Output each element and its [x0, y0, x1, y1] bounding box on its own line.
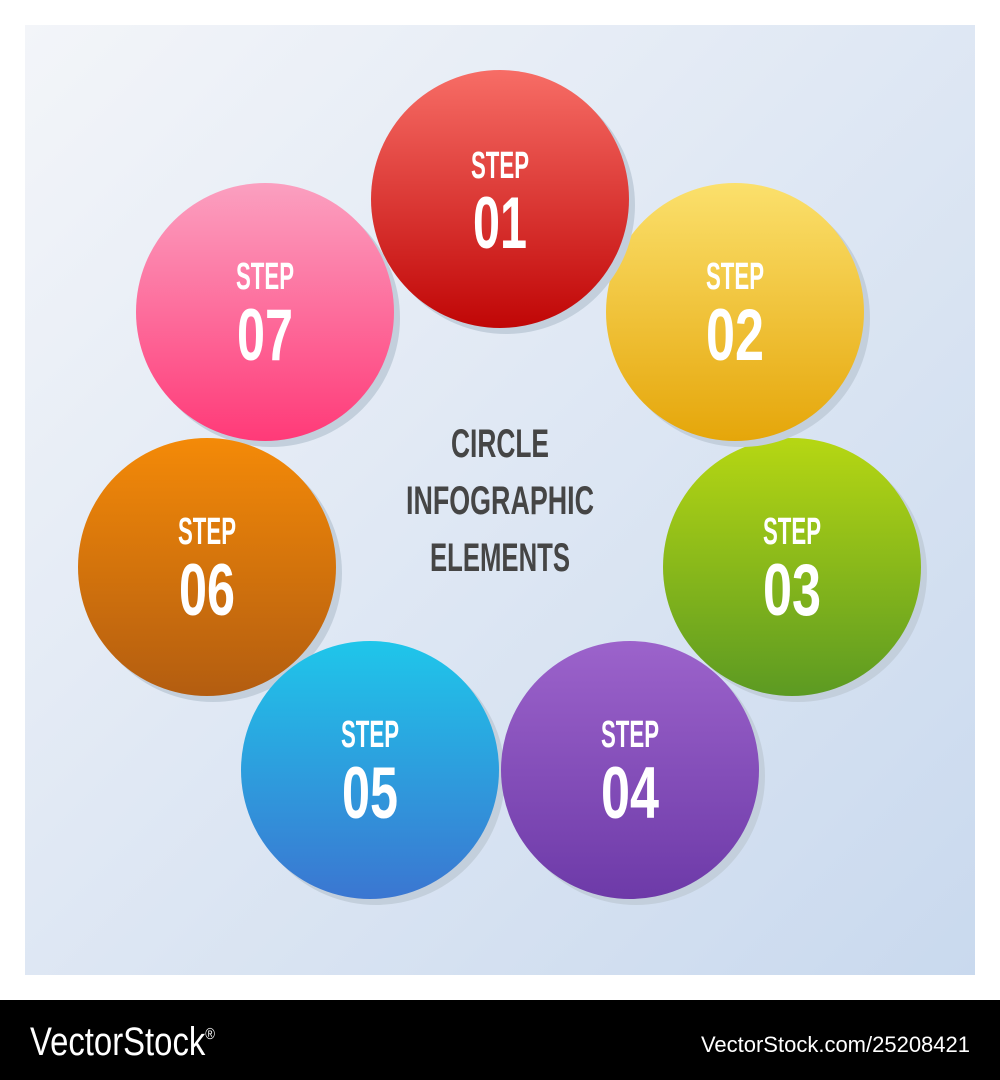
- step 04: [501, 641, 765, 905]
- step 02: 02: [706, 295, 764, 376]
- step 01: [371, 70, 635, 334]
- center title: ELEMENTS: [430, 536, 570, 580]
- step 03: STEP: [763, 511, 821, 553]
- step 04: 04: [601, 753, 659, 834]
- footer bar: VectorStock: [30, 1020, 243, 1064]
- step 05: 05: [342, 753, 398, 834]
- step 05: [241, 641, 505, 905]
- step 06: 06: [179, 550, 235, 631]
- step 01: 01: [473, 183, 527, 264]
- step 07: STEP: [236, 256, 294, 298]
- step 05: STEP: [341, 714, 399, 756]
- footer bar: [0, 1000, 1000, 1080]
- step 07: 07: [237, 295, 293, 376]
- step 01: STEP: [471, 145, 529, 187]
- step 07: [136, 183, 400, 447]
- step 06: [78, 438, 342, 702]
- step 02: [606, 183, 870, 447]
- step 04: STEP: [601, 714, 659, 756]
- step 03: [663, 438, 927, 702]
- center title: INFOGRAPHIC: [406, 479, 594, 523]
- footer bar: VectorStock.com/25208421: [701, 1032, 970, 1057]
- step 06: STEP: [178, 511, 236, 553]
- center title: CIRCLE: [451, 422, 549, 466]
- step 02: STEP: [706, 256, 764, 298]
- footer bar: ®: [205, 1026, 215, 1043]
- center title: [406, 422, 594, 580]
- step 03: 03: [763, 550, 821, 631]
